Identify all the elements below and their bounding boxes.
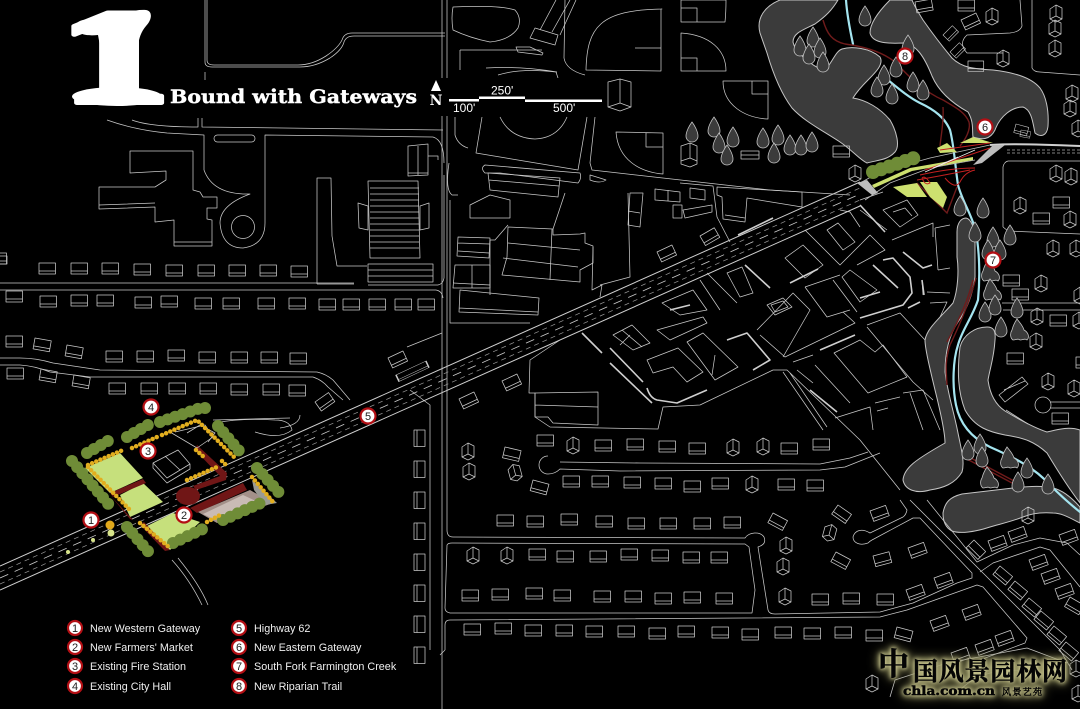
watermark: 国风景园林网 xyxy=(913,658,1067,686)
scale bar: 500' xyxy=(553,101,575,115)
title: Bound with Gateways xyxy=(170,86,417,108)
western gateway site xyxy=(66,407,300,557)
western gateway: yellow hedges xyxy=(88,420,273,548)
map markers: 1 xyxy=(88,515,94,527)
title numeral base swell xyxy=(72,87,162,106)
eastern gateway: tree band xyxy=(873,157,917,172)
watermark: chla.com.cn xyxy=(903,684,995,698)
western gateway: lawns xyxy=(85,453,200,550)
watermark: 风景艺苑 xyxy=(1002,686,1042,697)
eastern gateway: lawns xyxy=(872,137,993,208)
legend: New Western Gateway xyxy=(90,623,201,635)
legend: New Riparian Trail xyxy=(254,681,342,693)
western gateway: paved red plazas xyxy=(110,445,247,551)
legend: Highway 62 xyxy=(254,623,310,635)
legend: New Eastern Gateway xyxy=(254,642,362,654)
legend xyxy=(68,621,397,693)
legend: 1 xyxy=(72,623,78,635)
western gateway: tree rows xyxy=(72,407,283,557)
legend: 2 xyxy=(72,642,78,654)
legend: 6 xyxy=(236,642,242,654)
watermark: 中 xyxy=(878,647,909,682)
legend: 3 xyxy=(72,661,78,673)
scale bar xyxy=(449,84,602,115)
western gateway: farmers market xyxy=(198,490,273,523)
riparian trees xyxy=(686,6,1054,494)
title numeral flare xyxy=(76,10,151,46)
eastern gateway xyxy=(857,137,1005,208)
map markers: 3 xyxy=(145,446,151,458)
title backing xyxy=(440,78,606,116)
western gateway: site buildings xyxy=(153,415,300,483)
western gateway: market stalls xyxy=(203,495,258,520)
north arrow xyxy=(430,80,443,109)
scale bar: 100' xyxy=(453,101,475,115)
legend: 8 xyxy=(236,681,242,693)
map markers: 8 xyxy=(902,51,908,63)
legend: 4 xyxy=(72,681,78,693)
map markers xyxy=(84,48,1000,528)
highway 62 xyxy=(0,144,1080,590)
legend: New Farmers' Market xyxy=(90,642,193,654)
map markers: 6 xyxy=(982,122,988,134)
scale bar: 250' xyxy=(491,84,513,98)
creek xyxy=(846,0,1080,512)
western gateway: small gate tree xyxy=(66,520,114,554)
north arrow: N xyxy=(430,93,443,109)
eastern gateway: road edge xyxy=(925,150,975,172)
riparian green-space blobs xyxy=(759,0,1080,532)
riparian trail xyxy=(823,20,1014,484)
thick road edges xyxy=(582,205,932,412)
map markers: 7 xyxy=(990,255,996,267)
legend: 5 xyxy=(236,623,242,635)
map markers: 5 xyxy=(365,411,371,423)
legend: 7 xyxy=(236,661,242,673)
map markers: 4 xyxy=(148,402,154,414)
western gateway: corner paving xyxy=(252,480,277,505)
eastern gateway: crosswalks xyxy=(857,145,1005,195)
watermark xyxy=(878,647,1067,698)
eastern gateway: red intersection lines xyxy=(917,143,990,185)
legend: Existing City Hall xyxy=(90,681,171,693)
legend: South Fork Farmington Creek xyxy=(254,661,397,673)
map markers: 2 xyxy=(181,510,187,522)
legend: Existing Fire Station xyxy=(90,661,186,673)
